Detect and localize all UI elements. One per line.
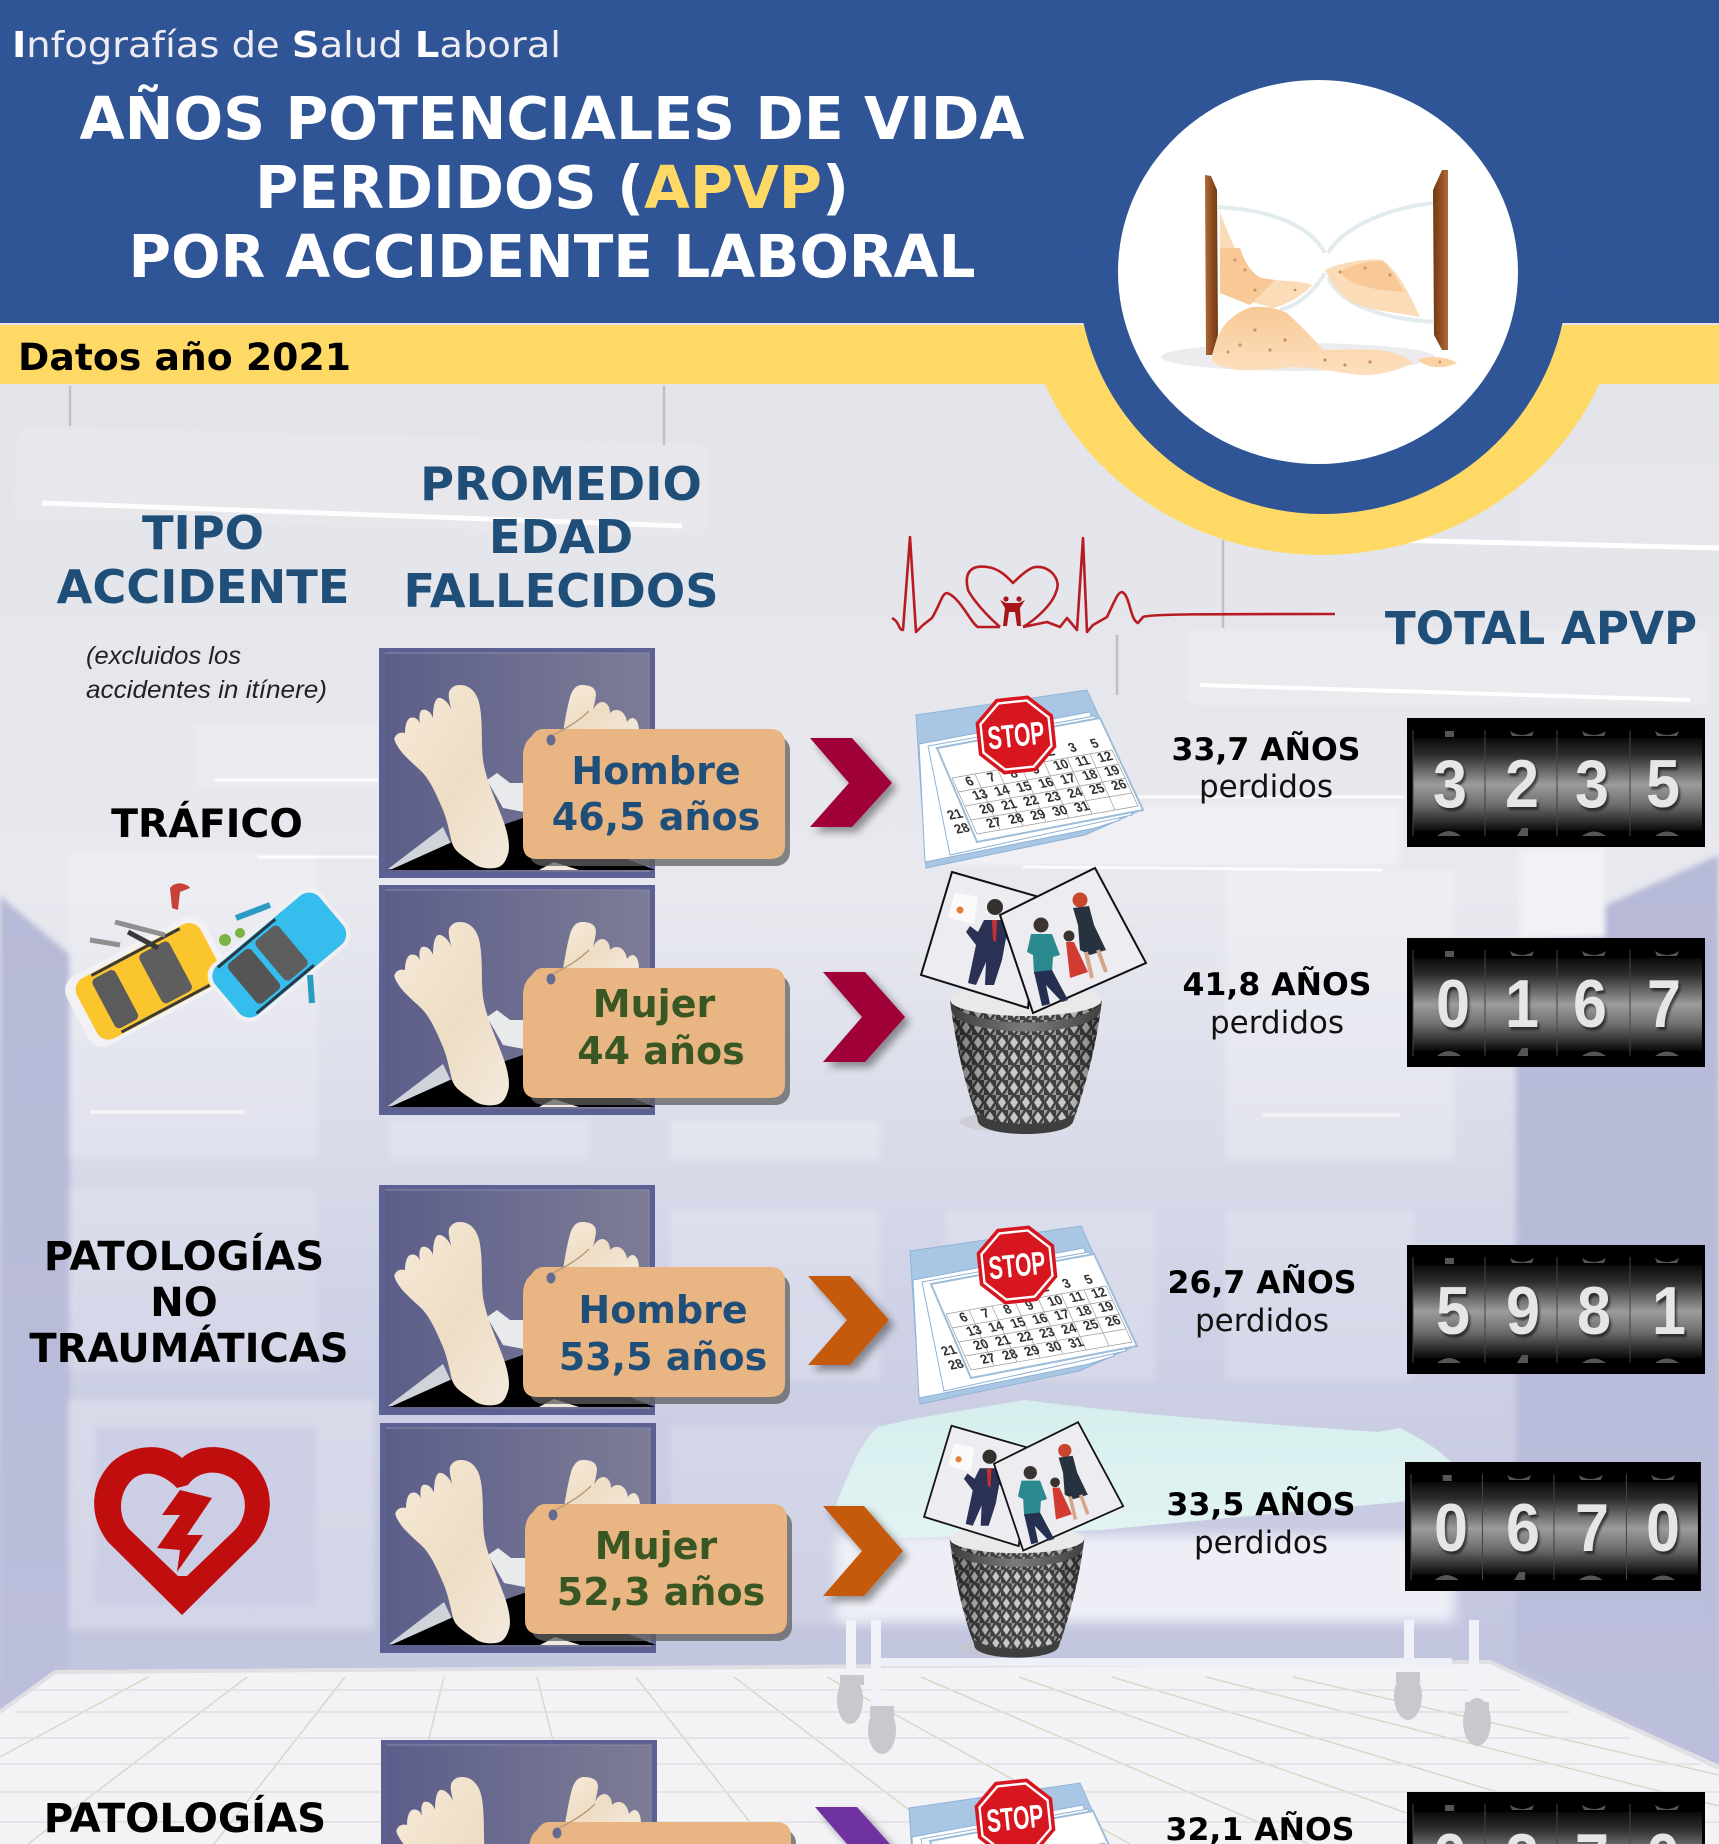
icon: calendar with stop sign: 10 [1050,756,1071,773]
icon: calendar with stop sign: 31 [1065,1334,1087,1351]
note: excluded accidents: (excluidos los [86,642,241,670]
row: last category, cropped at page edge [44,1740,1705,1844]
icon: calendar with stop sign: 7 [984,770,998,785]
category: patologías no traumáticas: TRAUMÁTICAS [29,1324,349,1372]
stretcher with sheet [836,1400,1491,1754]
tag: mujer: 44 años [577,1029,745,1073]
icon: calendar with stop sign: 3 [1059,1276,1073,1291]
heading: promedio edad fallecidos: PROMEDIO [420,457,702,511]
icon: calendar with stop sign: 23 [1042,788,1063,805]
icon: stop sign [972,1776,1058,1844]
icon: photos in trash basket [921,868,1146,1134]
heading: promedio edad fallecidos: FALLECIDOS [403,564,719,618]
icon: calendar with stop sign: 3 [1065,740,1079,755]
arrow [810,738,892,827]
icon: stop sign: STOP [987,1245,1047,1286]
icon: calendar with stop sign: 21 [944,806,966,823]
header band [0,0,1719,323]
icon: calendar with stop sign: 17 [1051,1306,1072,1323]
icon: calendar with stop sign: 17 [1057,770,1078,787]
counter: 5981: 5 [1436,1273,1470,1349]
tag: hombre: Hombre [578,1288,748,1332]
icon: calendar with stop sign [910,1223,1137,1404]
counter: 3235: 2 [1505,746,1539,822]
tag: hombre: Hombre [571,749,741,793]
tag: hombre: 46,5 años [552,795,760,839]
icon: calendar with stop sign: 27 [983,814,1004,831]
row: patologías hombre [379,1185,1705,1415]
row: tráfico hombre [111,648,1705,878]
counter: 0670: 6 [1506,1490,1540,1566]
icon: calendar with stop sign: 29 [1021,1342,1042,1359]
icon: heartbeat line with heart and family [892,537,1335,632]
tag: mujer: Mujer [595,1524,717,1568]
background: morgue room [0,384,1719,1844]
icon: calendar with stop sign: 2 [1037,1280,1051,1295]
icon: calendar with stop sign: 14 [991,782,1013,799]
years lost: 33,5 AÑOS [1167,1485,1355,1523]
tag: hombre [523,1249,790,1404]
icon: calendar with stop sign: 12 [1088,1285,1109,1301]
years lost: 41,8 AÑOS [1183,965,1371,1003]
counter: 5981: 8 [1577,1273,1611,1349]
icon: calendar with stop sign: 28 [1005,810,1027,827]
icon: calendar with stop sign: 22 [1020,792,1041,809]
icon: calendar with stop sign: 19 [1101,763,1122,779]
icon: stop sign [973,693,1059,777]
header circle with hourglass [1044,80,1600,555]
panel: feet [379,885,655,1115]
category: patologías no traumáticas: NO [150,1280,218,1326]
panel: feet [379,648,655,878]
note: excluded accidents [86,642,327,704]
icon: calendar with stop sign: 20 [976,800,997,817]
years lost: perdidos [1195,1303,1329,1339]
heading: promedio edad fallecidos: EDAD [489,510,633,564]
icon: calendar with stop sign: 26 [1108,777,1129,793]
icon: calendar with stop sign: 28 [945,1356,967,1373]
row: tráfico mujer [379,868,1705,1134]
icon: calendar with stop sign: 23 [1036,1324,1057,1341]
icon: crashed cars [59,881,358,1052]
icon: calendar with stop sign: 16 [1029,1310,1050,1327]
heading: tipo accidente [56,506,350,614]
counter: 3235: 5 [1646,746,1680,822]
icon: calendar with stop sign: 21 [992,1332,1014,1349]
icon: calendar with stop sign: 13 [963,1322,984,1339]
tag: hombre: 53,5 años [559,1335,767,1379]
counter [1407,1792,1705,1844]
icon: calendar with stop sign: 1 [1021,748,1036,763]
category: tráfico: TRÁFICO [111,800,303,847]
icon: calendar with stop sign: 11 [1072,752,1093,769]
counter: 5981: 1 [1652,1273,1686,1349]
heading: tipo accidente: ACCIDENTE [56,560,350,614]
yellow band [0,325,1719,384]
icon: calendar with stop sign: 24 [1058,1320,1080,1337]
counter: 0670 [1405,1462,1701,1591]
title: PERDIDOS (APVP) [255,154,849,222]
icon: calendar with stop sign: 27 [977,1350,998,1367]
tag: mujer [525,1486,792,1641]
row: patologías mujer [380,1422,1701,1658]
icon: stop sign: STOP [986,715,1046,756]
icon: calendar with stop sign: 2 [1043,744,1057,759]
icon: broken hourglass [1161,170,1457,375]
counter: 0167: 1 [1505,966,1539,1042]
counter: 0167 [1407,938,1705,1067]
years lost [1168,1263,1356,1339]
icon: calendar with stop sign: 29 [1027,806,1048,823]
panel: feet [380,1423,656,1653]
heading: tipo accidente: TIPO [142,506,264,560]
counter: 0670: 7 [1575,1490,1609,1566]
years lost: perdidos [1210,1005,1344,1041]
category: patologías no traumáticas [29,1232,349,1372]
tag: mujer [523,950,790,1105]
category: patologías: PATOLOGÍAS [44,1794,326,1842]
icon: calendar with stop sign: 22 [1014,1328,1035,1345]
icon: calendar with stop sign: 8 [1006,765,1021,781]
icon: calendar with stop sign: 8 [1000,1301,1015,1317]
counter: 0670: 0 [1434,1490,1468,1566]
arrow [815,1807,897,1844]
icon: calendar with stop sign: 18 [1079,766,1101,783]
icon: calendar with stop sign: 1 [1015,1284,1030,1299]
tag: mujer: 52,3 años [557,1570,765,1614]
icon: calendar with stop sign [909,1776,1136,1844]
counter: 3235: 3 [1575,746,1609,822]
arrow [823,972,905,1062]
counter: 0167: 6 [1573,966,1607,1042]
icon: calendar with stop sign: 28 [999,1346,1021,1363]
floor tiles [0,1662,1719,1844]
icon: calendar with stop sign: 25 [1086,780,1108,797]
arrow [808,1276,889,1365]
icon: stop sign [974,1223,1060,1307]
icon: calendar with stop sign: 6 [962,774,976,789]
icon: calendar with stop sign: 18 [1073,1302,1095,1319]
icon: calendar with stop sign: 20 [970,1336,991,1353]
icon: calendar with stop sign: 16 [1035,774,1056,791]
icon: calendar with stop sign: 26 [1102,1313,1123,1329]
panel: feet [379,1185,655,1415]
counter: 5981: 9 [1506,1273,1540,1349]
years lost [1172,730,1360,805]
icon: calendar with stop sign: 5 [1081,1272,1096,1287]
icon: photos in trash basket [924,1422,1123,1658]
years lost: perdidos [1194,1525,1328,1561]
icon: calendar with stop sign: 15 [1013,778,1035,795]
icon: calendar with stop sign: 10 [1044,1292,1065,1309]
icon: calendar with stop sign: 24 [1064,784,1086,801]
counter: 0670: 0 [1646,1490,1680,1566]
icon: calendar with stop sign: 9 [1022,1298,1036,1313]
panel: feet [381,1740,657,1844]
icon: calendar with stop sign: 15 [1007,1314,1029,1331]
years lost: 26,7 AÑOS [1168,1263,1356,1301]
counter: 0167: 7 [1647,966,1681,1042]
icon: calendar with stop sign: 6 [956,1310,970,1325]
heading: total apvp: TOTAL APVP [1385,602,1697,655]
title: AÑOS POTENCIALES DE VIDA [80,84,1024,153]
icon: calendar with stop sign: 5 [1087,736,1102,751]
icon: broken heart [94,1447,270,1615]
icon: calendar with stop sign: 21 [938,1342,960,1359]
counter: 3235: 3 [1433,746,1467,822]
icon: calendar with stop sign: 21 [998,796,1020,813]
year label: Datos año 2021 [18,335,351,379]
icon: calendar with stop sign: 11 [1066,1288,1087,1305]
icon: calendar with stop sign: 30 [1049,802,1070,819]
icon: calendar with stop sign: 28 [951,820,973,837]
icon: calendar with stop sign: 19 [1095,1299,1116,1315]
subtitle: series name: Infografías de Salud Laboral [12,25,561,66]
counter: 0167: 0 [1436,966,1470,1042]
years lost [1183,965,1371,1041]
icon: calendar with stop sign: 14 [985,1318,1007,1335]
note: excluded accidents: accidentes in itínere) [86,676,327,704]
icon: calendar with stop sign: 9 [1028,762,1042,777]
icon: stop sign: STOP [985,1798,1045,1839]
icon: calendar with stop sign: 25 [1080,1316,1102,1333]
counter: 5981 [1407,1245,1705,1374]
years lost [1167,1485,1355,1561]
tag: hombre [523,711,790,866]
icon: calendar with stop sign: 30 [1043,1338,1064,1355]
icon: calendar with stop sign: 13 [969,786,990,803]
icon: calendar with stop sign: 12 [1094,749,1115,765]
arrow [823,1506,903,1596]
icon: calendar with stop sign: 7 [978,1306,992,1321]
category: patologías no traumáticas: PATOLOGÍAS [44,1232,324,1280]
heading: promedio edad fallecidos [403,457,719,618]
title: POR ACCIDENTE LABORAL [128,223,976,291]
icon: calendar with stop sign: 31 [1071,798,1093,815]
tag [529,1804,796,1844]
counter: 3235 [1407,718,1705,847]
tag: mujer: Mujer [593,982,715,1026]
years lost: 33,7 AÑOS [1172,730,1360,768]
title [80,84,1024,291]
icon: calendar with stop sign [916,690,1143,868]
years lost: perdidos [1199,769,1333,805]
